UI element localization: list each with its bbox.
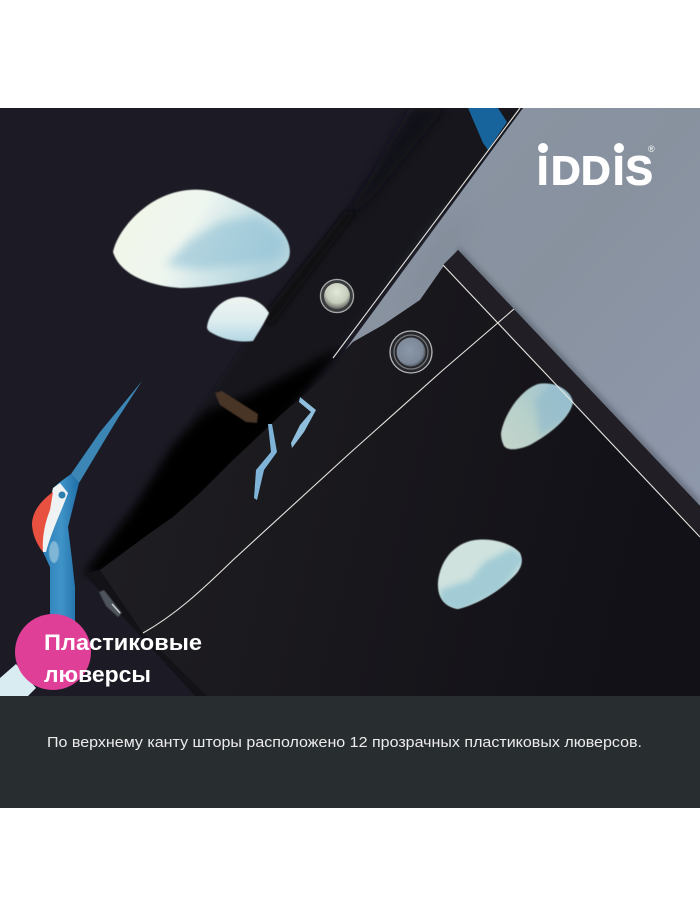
blue wash on lower pebble	[440, 548, 526, 612]
stitch lines	[143, 108, 700, 633]
logo: IDDIS	[537, 148, 653, 194]
soft fold shadow on strip	[367, 111, 418, 182]
blue feather at top edge	[468, 108, 507, 150]
darker shading on grey fabric	[424, 224, 437, 241]
pale neck blotches	[49, 541, 59, 563]
brown crane leg fragment	[215, 391, 258, 423]
bottom-left hem fold	[84, 570, 207, 696]
stone: lower pebble	[438, 540, 526, 612]
blue wash on hem pebble	[535, 384, 575, 436]
deep fold shadow	[84, 345, 345, 575]
blue lightning mark left	[254, 424, 277, 500]
folded curtain strip	[206, 110, 518, 406]
stone: large pebble	[113, 190, 290, 288]
flap shadow on grey fabric	[458, 246, 700, 512]
body lower left	[0, 664, 36, 696]
grey reverse side of curtain	[345, 108, 700, 506]
product photo: curtain corner with grommets	[0, 108, 700, 696]
blue lightning mark right	[291, 397, 316, 448]
blue eye patch	[58, 492, 66, 498]
red crown	[32, 492, 53, 552]
neck	[43, 474, 79, 625]
description text: По верхнему канту шторы расположено 12 прозрачных пластиковых люверсов.	[47, 735, 642, 751]
heading: люверсы	[44, 662, 151, 687]
blue wash on large pebble	[165, 215, 285, 270]
heading: Пластиковые	[44, 630, 202, 655]
grommet: lower	[390, 330, 432, 374]
description band	[0, 696, 700, 808]
shadow along strip edge	[262, 212, 356, 325]
grommet: bottom fold	[99, 590, 122, 617]
back curtain panel	[0, 108, 700, 696]
crane bird	[0, 381, 142, 696]
hem band tone	[443, 250, 700, 537]
logo: ®	[648, 144, 655, 154]
heading	[44, 630, 202, 687]
front curtain flap	[84, 250, 700, 696]
stone: pebble near hem	[501, 383, 575, 449]
head white stripe	[42, 483, 68, 552]
beak	[71, 381, 142, 483]
logo dots	[538, 143, 548, 153]
pink circle accent	[15, 614, 91, 690]
grommet: upper	[320, 278, 354, 314]
stone: small pebble	[207, 297, 269, 342]
